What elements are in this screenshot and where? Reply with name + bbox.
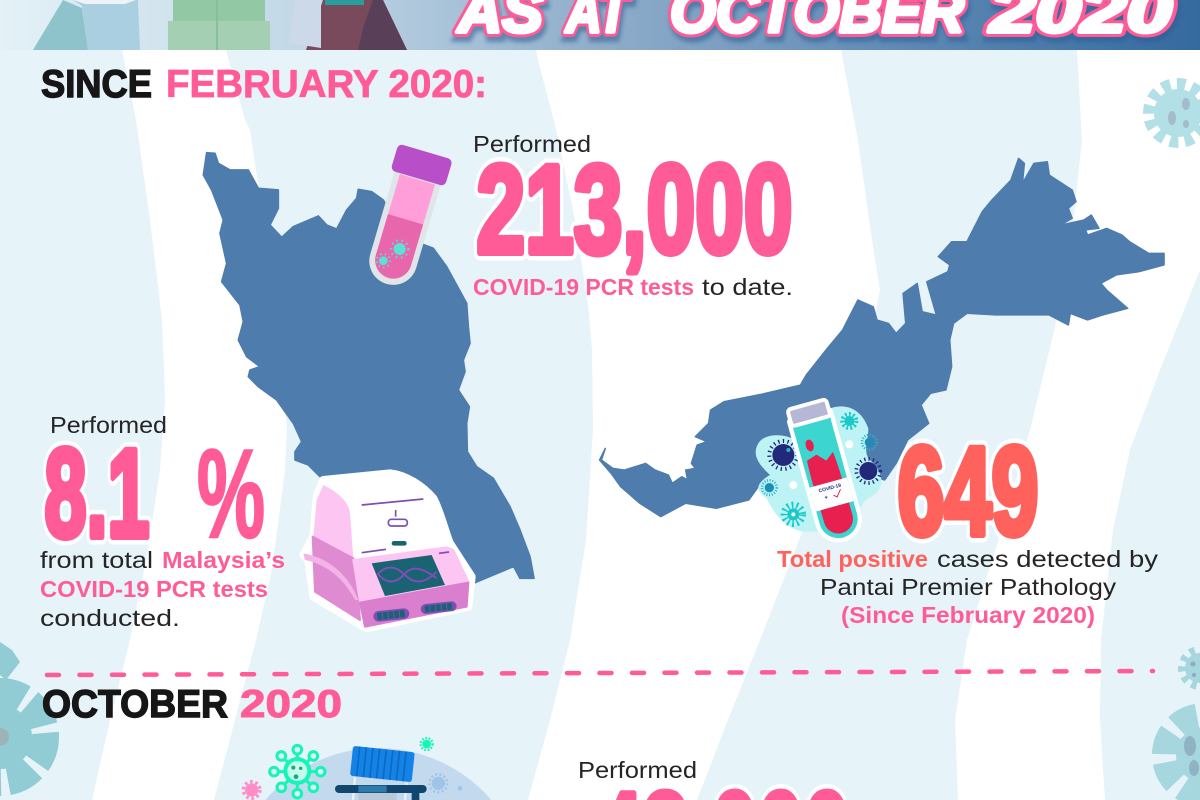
performed 213,000 stat [473, 131, 793, 300]
heading: october 2020: OCTOBER [42, 683, 228, 726]
icon: pink test tube [359, 144, 453, 292]
icon: green small virus [421, 738, 433, 750]
performed october stat [578, 757, 850, 800]
heading: october 2020 [42, 683, 342, 726]
performed 8.1% stat: Performed [50, 412, 167, 438]
icon: pale blue virus [429, 774, 462, 792]
performed october stat: Performed [578, 757, 697, 783]
performed 213,000 stat: Performed [473, 131, 591, 157]
icon: teal star bottom [785, 506, 802, 523]
performed 8.1% stat: 8.1 [44, 424, 150, 564]
illustration: lab centrifuge with viruses [243, 738, 491, 800]
icon: navy virus right [856, 459, 880, 483]
icon: small virus right [1183, 651, 1200, 685]
performed 213,000 stat: to date. [702, 274, 793, 300]
649 positive cases stat: 649 [898, 422, 1038, 562]
649 positive cases stat [777, 422, 1159, 628]
icon: large virus right [1166, 717, 1200, 793]
icon: green ring virus [270, 745, 325, 798]
header banner [0, 0, 1200, 50]
icon: tube body [787, 399, 863, 543]
icon: small blue viruses [762, 435, 877, 495]
performed 8.1% stat: 8.1 [44, 424, 150, 564]
performed 8.1% stat: % [197, 425, 265, 564]
icon: pcr machine [303, 473, 472, 628]
map: east malaysia [600, 158, 1164, 517]
icon: tube body: + [824, 495, 829, 502]
649 positive cases stat: Total positive [777, 546, 928, 572]
performed 213,000 stat: COVID-19 PCR tests [473, 274, 694, 300]
illustration: health workers [33, 0, 407, 50]
title [456, 0, 1174, 50]
heading: october 2020: 2020 [240, 683, 342, 726]
performed 213,000 stat: 213,000 [476, 140, 792, 280]
performed 8.1% stat: COVID-19 PCR tests [40, 576, 268, 602]
icon: virus bottom left [0, 642, 44, 781]
icon: virus top right [1151, 86, 1200, 140]
performed 8.1% stat [40, 412, 285, 631]
performed 8.1% stat: Malaysia’s [162, 547, 285, 573]
performed 213,000 stat: 213,000 [476, 140, 792, 280]
performed 8.1% stat: % [197, 425, 265, 564]
icon: blood sample tube with viruses [756, 399, 882, 543]
icon: navy virus left [769, 441, 797, 469]
heading: since february 2020: SINCE [41, 63, 152, 106]
649 positive cases stat: Pantai Premier Pathology [820, 574, 1117, 600]
649 positive cases stat: 649 [898, 422, 1038, 562]
icon: tube body: COVID-19 [818, 483, 842, 495]
performed 8.1% stat: conducted. [40, 605, 180, 631]
icon: teal star top [843, 415, 856, 427]
map: peninsular malaysia [203, 153, 534, 583]
649 positive cases stat: cases detected by [937, 546, 1159, 572]
heading: since february 2020: FEBRUARY 2020: [166, 63, 487, 106]
649 positive cases stat: (Since February 2020) [841, 602, 1095, 628]
icon: pink virus [243, 782, 260, 798]
performed 8.1% stat: from total [40, 547, 153, 573]
